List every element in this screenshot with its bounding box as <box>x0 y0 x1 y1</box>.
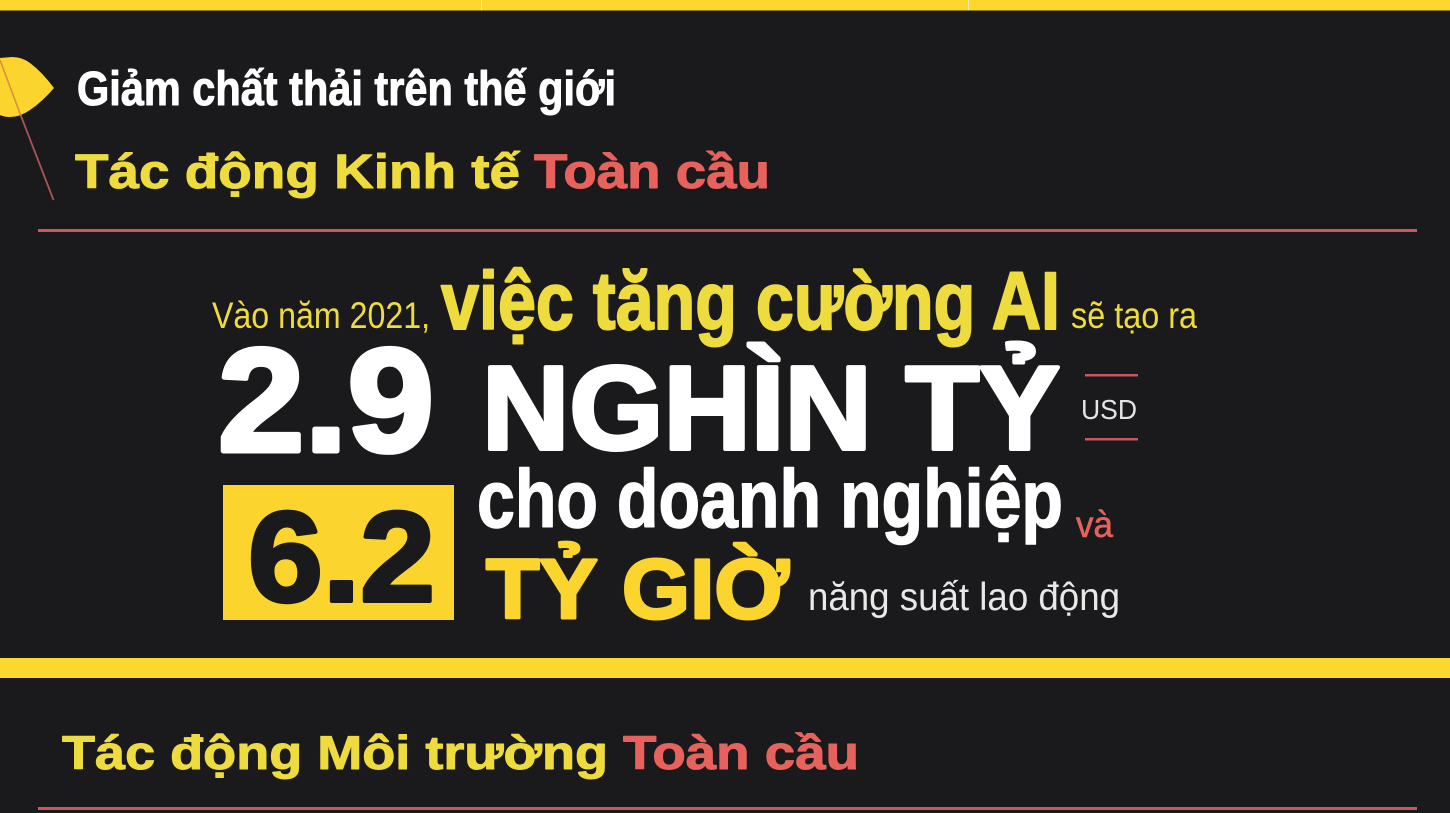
text block: for business: cho doanh nghiệp <box>477 454 1063 545</box>
text block: AI statement line 1: sẽ tạo ra <box>1071 295 1197 336</box>
text block: AI statement line 1: Vào năm 2021, <box>212 295 430 336</box>
currency label: USD: USD <box>1081 394 1137 425</box>
icon: yellow leaf with stem <box>0 57 54 200</box>
top yellow band <box>0 0 1450 10</box>
divider: environmental heading <box>38 807 1417 810</box>
statistic label: NGHÌN TỶ: NGHÌN TỶ <box>482 342 1060 475</box>
text block: billion hours of productivity: năng suất lao động <box>808 576 1120 619</box>
heading: economic impact <box>75 146 770 199</box>
text block: AI statement line 1: việc tăng cường AI <box>441 256 1060 347</box>
heading: economic impact: Tác động Kinh tế <box>75 146 520 199</box>
statistic: 2.9: 2.9 <box>218 319 434 483</box>
heading: environmental impact <box>62 726 859 779</box>
divider: economic heading <box>38 229 1417 232</box>
yellow section band <box>0 658 1450 678</box>
heading: environmental impact: Toàn cầu <box>623 726 859 779</box>
heading: environmental impact: Tác động Môi trường <box>62 726 608 779</box>
text block: for business: và <box>1076 504 1113 545</box>
title: Giảm chất thải trên thế giới <box>77 63 616 116</box>
text block: billion hours of productivity: TỶ GIỜ <box>486 542 789 636</box>
heading: economic impact: Toàn cầu <box>534 146 770 199</box>
text block: billion hours of productivity <box>486 542 1120 636</box>
statistic: 6.2 badge: 6.2 <box>248 486 435 629</box>
currency label: USD <box>1081 374 1138 440</box>
